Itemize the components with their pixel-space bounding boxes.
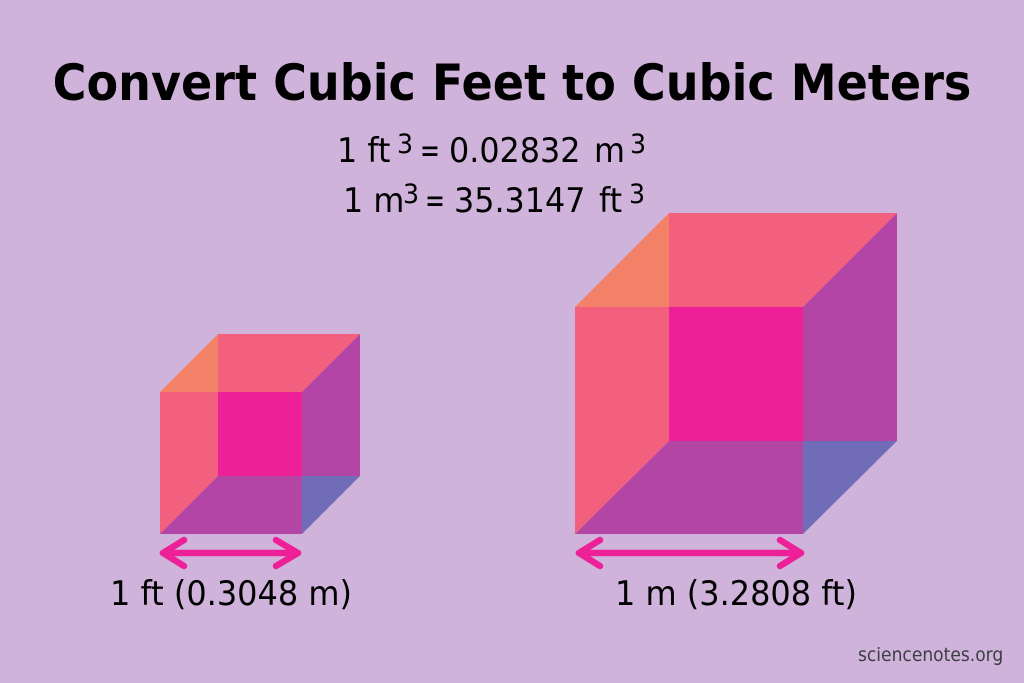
equation: cubic meters to cubic feet: ft	[599, 181, 622, 221]
equation: cubic feet to cubic meters: =	[420, 131, 439, 171]
equation: cubic meters to cubic feet: 3	[403, 179, 419, 210]
equation: cubic meters to cubic feet: 1 m	[343, 181, 404, 221]
label: small cube size: 1 ft (0.3048 m)	[110, 574, 352, 614]
large cube	[575, 213, 897, 534]
title: Convert Cubic Feet to Cubic Meters	[53, 54, 971, 112]
equation: cubic meters to cubic feet	[343, 179, 645, 221]
equation: cubic meters to cubic feet: 3	[629, 179, 645, 210]
small cube	[160, 334, 360, 534]
arrow: small cube width	[163, 540, 298, 566]
equation: cubic feet to cubic meters: m	[594, 131, 625, 171]
arrow: large cube width	[579, 540, 801, 566]
equation: cubic feet to cubic meters: 3	[630, 129, 646, 160]
source credit: sciencenotes.org	[858, 644, 1003, 666]
equation: cubic feet to cubic meters: 3	[397, 129, 413, 160]
equation: cubic meters to cubic feet: =	[424, 181, 444, 221]
equation: cubic meters to cubic feet: 35.3147	[454, 181, 585, 221]
equation: cubic feet to cubic meters: 1 ft	[337, 131, 390, 171]
equation: cubic feet to cubic meters	[337, 129, 646, 171]
equation: cubic feet to cubic meters: 0.02832	[449, 131, 580, 171]
label: large cube size: 1 m (3.2808 ft)	[615, 574, 857, 614]
